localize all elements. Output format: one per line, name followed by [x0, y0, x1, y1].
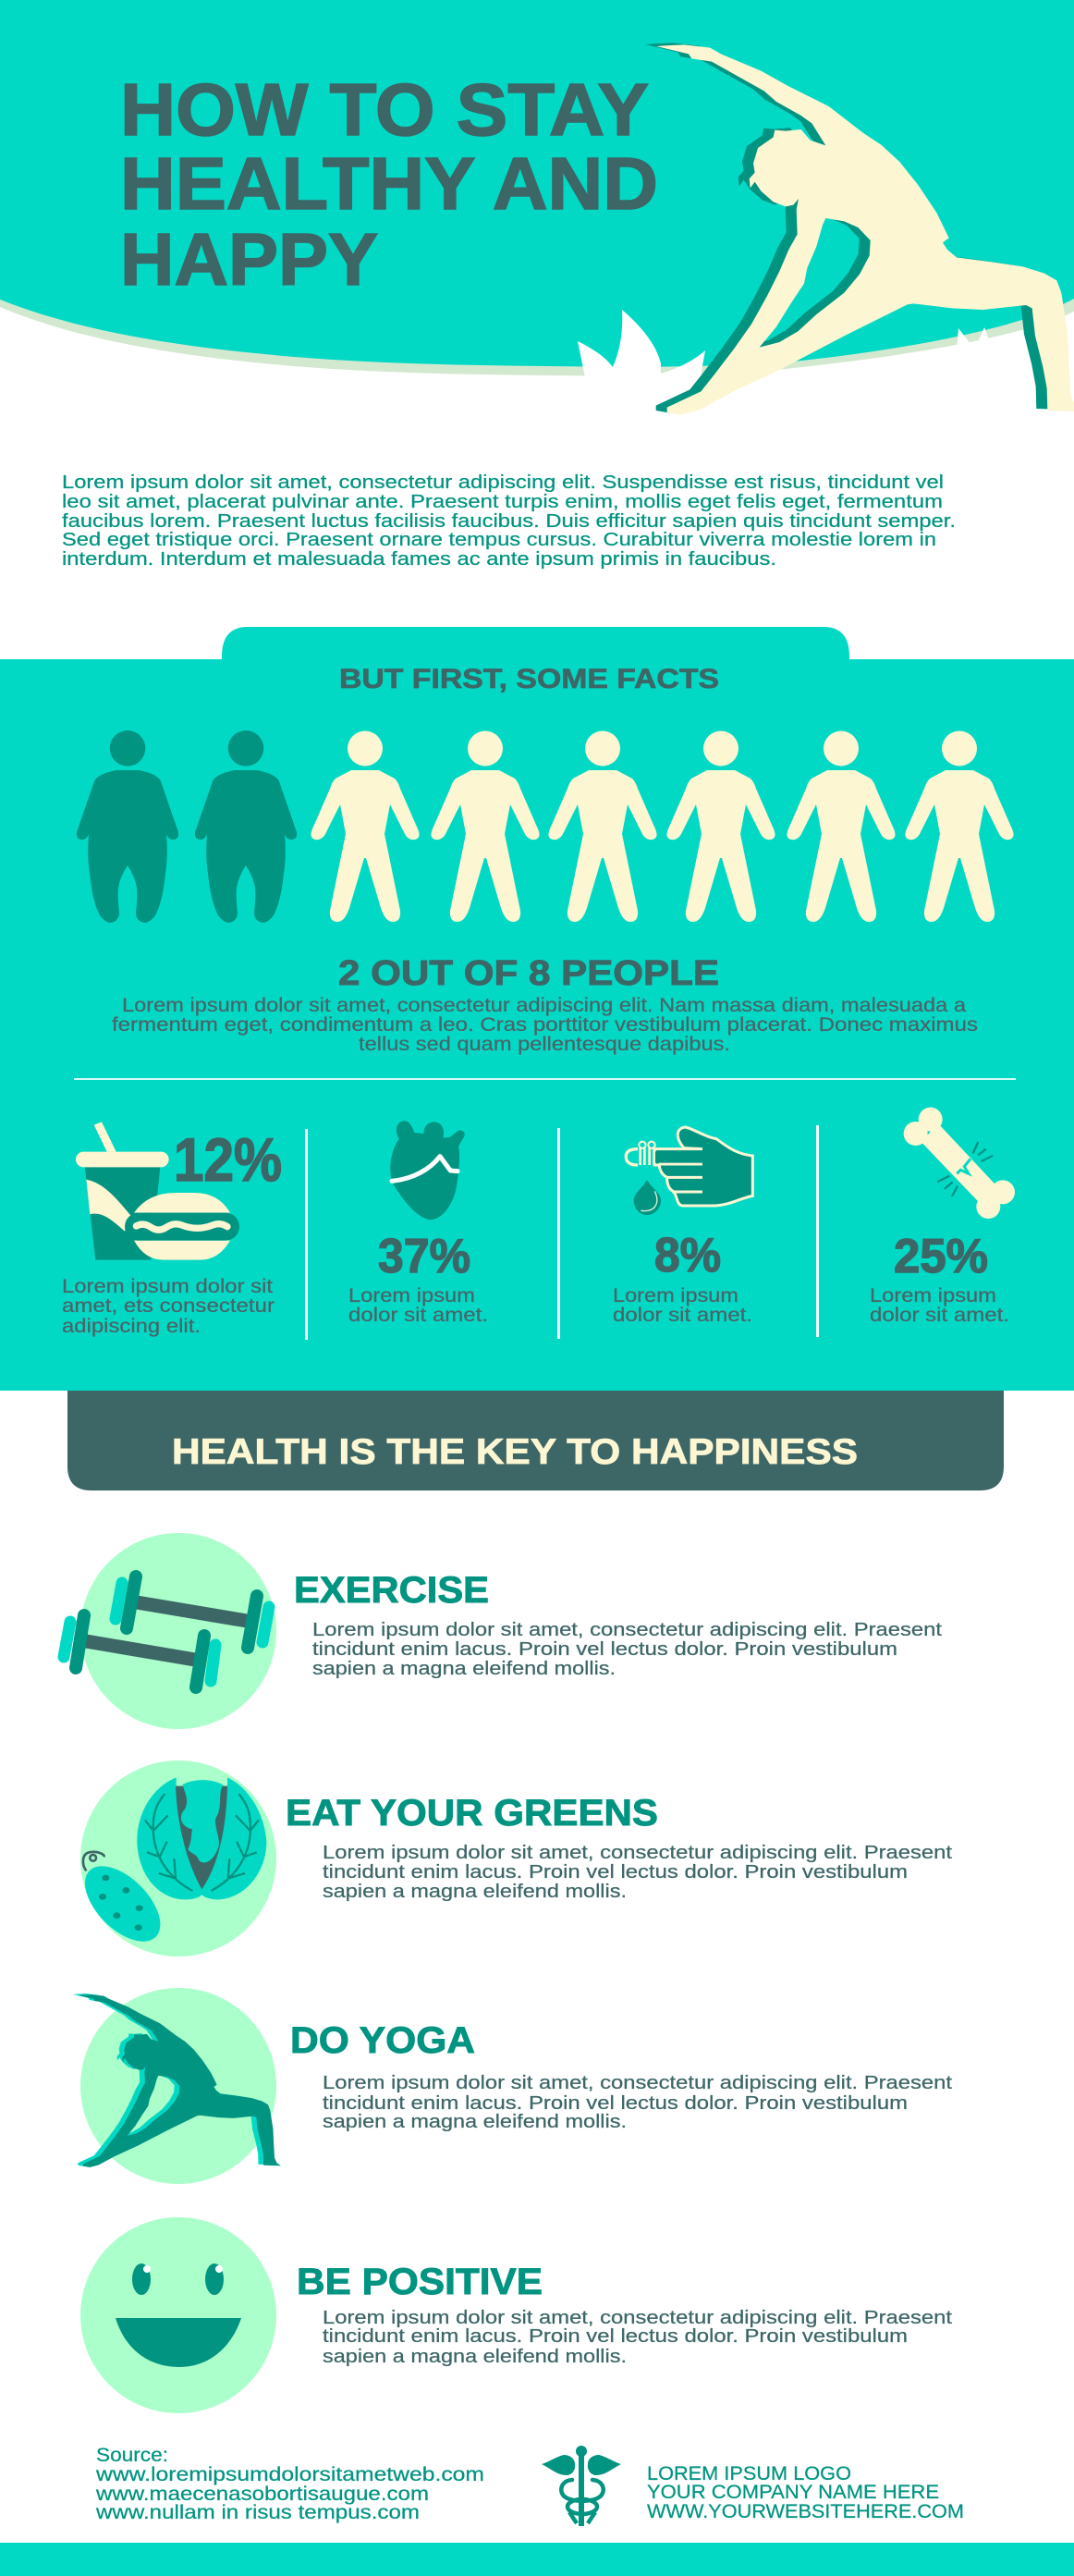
section: eat your greens [72, 1760, 952, 1957]
panel: hero header [0, 0, 1074, 415]
title: HAPPY [120, 218, 378, 301]
positive text: Lorem ipsum dolor sit amet, consectetur adipiscing elit. Praesent [323, 2307, 952, 2328]
stat: 12%: adipiscing elit. [62, 1316, 201, 1337]
footer company text: LOREM IPSUM LOGO [647, 2463, 851, 2484]
footer sources: www.nullam in risus tempus.com [95, 2502, 420, 2523]
heading: but first: BUT FIRST, SOME FACTS [339, 664, 719, 694]
stat: 8%: 8% [654, 1229, 721, 1282]
positive text: sapien a magna eleifend mollis. [323, 2346, 627, 2367]
stat: 37%: Lorem ipsum [348, 1285, 475, 1306]
icon: broken bone [904, 1108, 1015, 1219]
section: exercise [64, 1533, 942, 1729]
stat: 37%: dolor sit amet. [348, 1305, 488, 1326]
title: HOW TO STAY [120, 68, 649, 151]
stat: 25%: Lorem ipsum [870, 1285, 996, 1306]
yoga text [323, 2072, 952, 2132]
footer band [0, 2543, 1074, 2576]
intro text [62, 472, 956, 570]
stat: 25%: 25% [894, 1230, 988, 1283]
footer company text: YOUR COMPANY NAME HERE [647, 2482, 939, 2503]
exercise text: Lorem ipsum dolor sit amet, consectetur adipiscing elit. Praesent [312, 1619, 942, 1640]
positive text: tincidunt enim lacus. Proin vel lectus dolor. Proin vestibulum [323, 2325, 908, 2347]
stat: 12%: 12% [174, 1125, 282, 1194]
panel: facts [0, 627, 1074, 1391]
stat: 12%: Lorem ipsum dolor sit [62, 1276, 273, 1297]
intro text: leo sit amet, placerat pulvinar ante. Praesent turpis enim, mollis eget felis eget, fermentum [62, 491, 943, 512]
greens text: tincidunt enim lacus. Proin vel lectus dolor. Proin vestibulum [323, 1861, 908, 1883]
footer company text: WWW.YOURWEBSITEHERE.COM [647, 2501, 964, 2522]
stat: 12%: amet, ets consectetur [62, 1295, 275, 1317]
yoga text: sapien a magna eleifend mollis. [323, 2111, 627, 2132]
intro text: Sed eget tristique orci. Praesent ornare tempus cursus. Curabitur viverra molestie lorem in [62, 529, 936, 550]
title: HEALTHY AND [120, 142, 658, 225]
footer sources: Source: [96, 2445, 168, 2466]
section: do yoga [73, 1988, 952, 2184]
heading: eat your greens: EAT YOUR GREENS [286, 1793, 658, 1834]
footer sources [95, 2445, 484, 2523]
footer sources: www.maecenasobortisaugue.com [95, 2484, 429, 2505]
heading: do yoga: DO YOGA [290, 2020, 475, 2061]
greens text [323, 1842, 952, 1902]
positive text [323, 2307, 952, 2367]
icon: cabbage and cucumber [72, 1777, 266, 1955]
intro text: interdum. Interdum et malesuada fames ac ante ipsum primis in faucibus. [62, 548, 776, 570]
stat: 12% [62, 1122, 282, 1337]
intro text: faucibus lorem. Praesent luctus facilisis faucibus. Duis efficitur sapien quis tincidunt semper. [62, 510, 956, 532]
stat: 37% [348, 1121, 488, 1326]
exercise text: sapien a magna eleifend mollis. [312, 1658, 616, 1679]
stat: 25%: dolor sit amet. [870, 1305, 1009, 1326]
facts paragraph [112, 995, 978, 1055]
icon: injured hand [626, 1127, 752, 1215]
icon: caduceus logo [542, 2446, 621, 2526]
banner: health is the key [67, 1391, 1004, 1490]
illustration: yoga figure [645, 43, 1074, 415]
icon: yoga figure [73, 1993, 281, 2167]
heading: exercise: EXERCISE [294, 1570, 489, 1611]
stat: 8% [613, 1127, 752, 1326]
footer company text [647, 2463, 964, 2522]
icon: heart [390, 1121, 465, 1220]
icon: dumbbells [64, 1576, 269, 1687]
stat: 8%: dolor sit amet. [613, 1305, 752, 1326]
exercise text [312, 1619, 942, 1679]
stat: 37%: 37% [378, 1230, 470, 1283]
intro text: Lorem ipsum dolor sit amet, consectetur adipiscing elit. Suspendisse est risus, tincidunt vel [62, 472, 944, 493]
exercise text: tincidunt enim lacus. Proin vel lectus dolor. Proin vestibulum [312, 1638, 897, 1660]
facts paragraph: tellus sed quam pellentesque dapibus. [359, 1034, 730, 1055]
heading: 2 out of 8 people: 2 OUT OF 8 PEOPLE [338, 954, 719, 993]
greens text: Lorem ipsum dolor sit amet, consectetur adipiscing elit. Praesent [323, 1842, 952, 1863]
greens text: sapien a magna eleifend mollis. [323, 1881, 627, 1902]
yoga text: Lorem ipsum dolor sit amet, consectetur adipiscing elit. Praesent [323, 2072, 952, 2093]
icon: smiley face [116, 2263, 241, 2367]
stat: 8%: Lorem ipsum [613, 1285, 738, 1306]
heading: be positive: BE POSITIVE [297, 2262, 543, 2302]
title [120, 68, 658, 301]
stat: 25% [870, 1108, 1015, 1326]
yoga text: tincidunt enim lacus. Proin vel lectus dolor. Proin vestibulum [323, 2092, 908, 2114]
facts paragraph: fermentum eget, condimentum a leo. Cras porttitor vestibulum placerat. Donec maximus [112, 1014, 978, 1036]
icon: soda and burger [76, 1122, 239, 1260]
pictogram: 2 of 8 people [77, 730, 1014, 923]
footer sources: www.loremipsumdolorsitametweb.com [95, 2464, 484, 2485]
section: be positive [80, 2217, 952, 2413]
banner: health is the key: HEALTH IS THE KEY TO HAPPINESS [172, 1432, 858, 1472]
facts paragraph: Lorem ipsum dolor sit amet, consectetur adipiscing elit. Nam massa diam, malesuada a [122, 995, 966, 1016]
